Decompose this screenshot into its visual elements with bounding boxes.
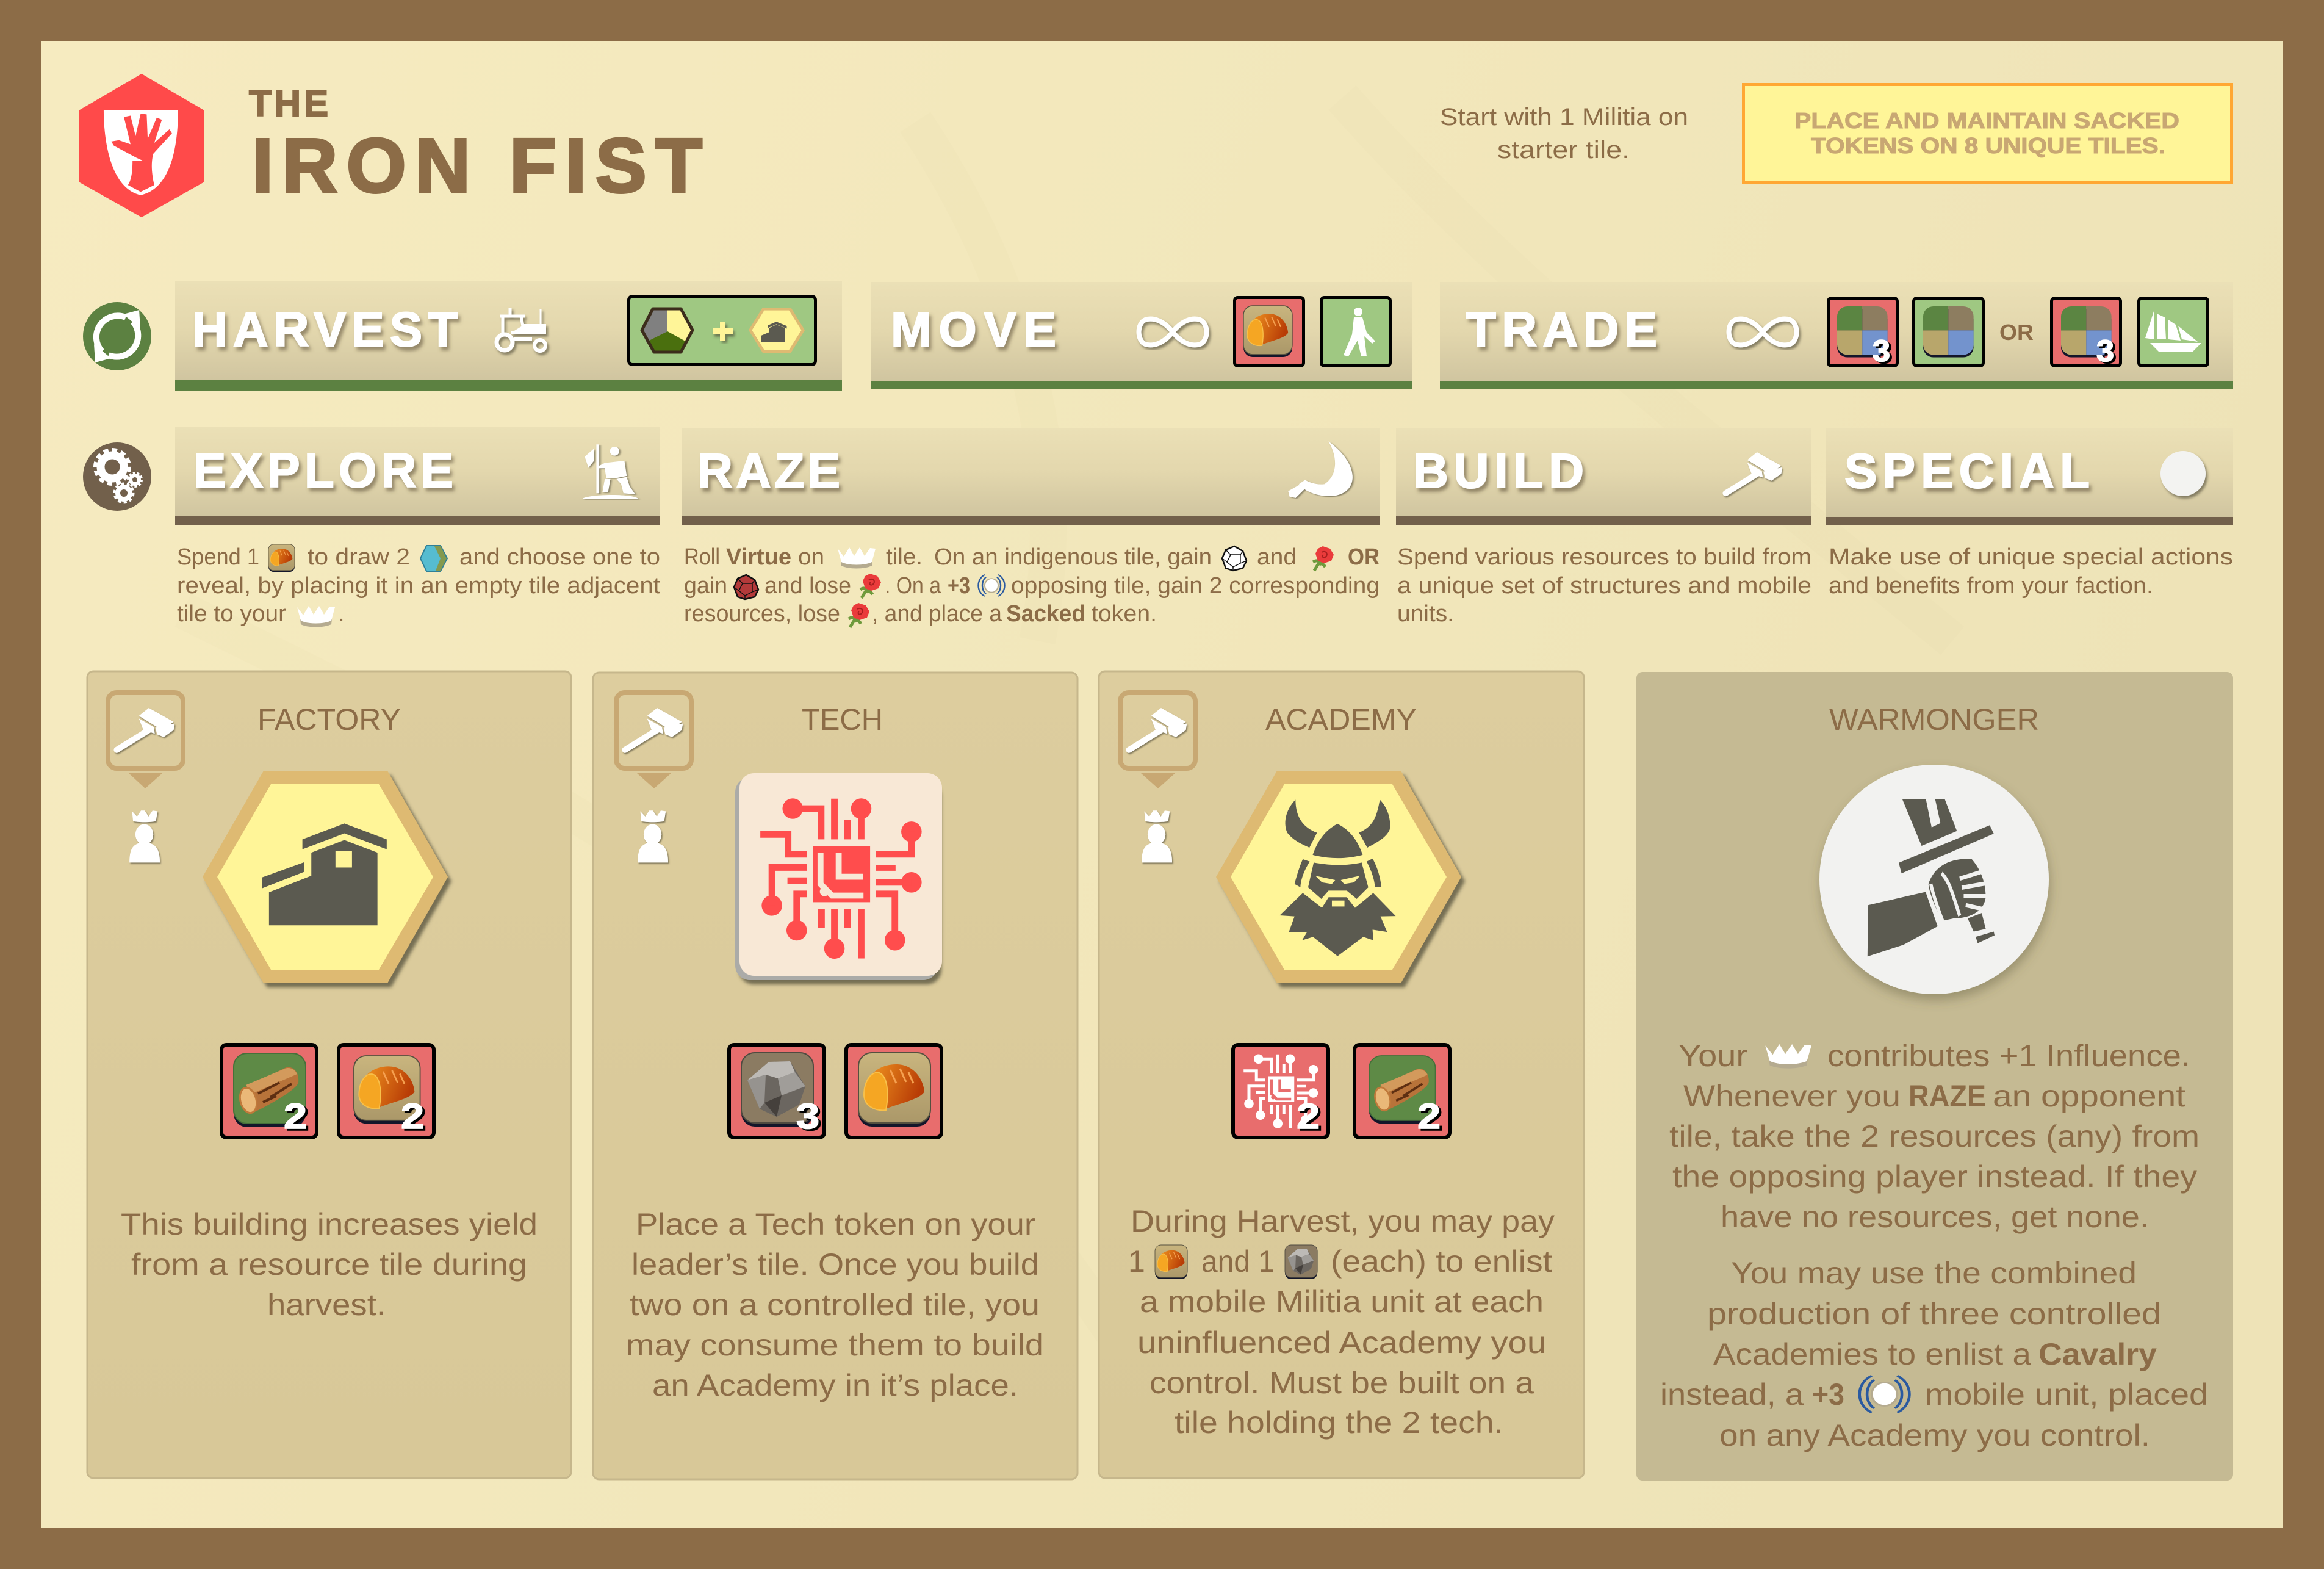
setup text: starter tile. bbox=[1497, 137, 1630, 164]
text block: raze: +3 bbox=[948, 573, 970, 599]
heading: harvest: HARVEST bbox=[192, 302, 458, 356]
panel: explore bbox=[175, 427, 660, 525]
icon: virtue ring bbox=[1860, 1376, 1909, 1413]
icon: leader bbox=[1142, 810, 1172, 862]
heading: academy: ACADEMY bbox=[1265, 702, 1417, 737]
icon: white disc bbox=[2160, 451, 2206, 496]
text block: raze: resources, lose bbox=[684, 601, 840, 627]
heading: factory: FACTORY bbox=[257, 702, 401, 737]
text block: raze: tile. bbox=[886, 544, 923, 570]
text: tech description bbox=[626, 1207, 1044, 1402]
logo: red hexagon with hand shield bbox=[80, 74, 203, 217]
build badge bbox=[108, 693, 183, 788]
icon: hex tile bbox=[420, 546, 447, 571]
text: warmonger first paragraph: Whenever you bbox=[1683, 1079, 1901, 1113]
text block: raze: On an indigenous tile, gain bbox=[934, 544, 1212, 570]
panel: harvest bbox=[175, 281, 842, 391]
icon: rose bbox=[849, 603, 869, 627]
icon: bread bbox=[268, 544, 295, 572]
icon: bread bbox=[1155, 1245, 1187, 1279]
icon: virtue ring bbox=[979, 575, 1004, 596]
text block: raze: gain bbox=[684, 573, 727, 599]
text block: explore: to draw 2 bbox=[308, 544, 410, 570]
title bbox=[249, 83, 702, 209]
icon: infinity bbox=[1139, 319, 1207, 345]
cost: 2 wood bbox=[221, 1045, 317, 1138]
text: warmonger first paragraph bbox=[1669, 1039, 2200, 1234]
token: bread cost bbox=[1235, 298, 1303, 366]
text block: explore: reveal, by placing it in an empty tile adjacent bbox=[177, 573, 660, 599]
icon: rose bbox=[860, 574, 881, 598]
text: warmonger first paragraph: contributes +1 Influence. bbox=[1827, 1039, 2190, 1073]
text block: raze: and bbox=[1257, 544, 1297, 570]
heading: raze: RAZE bbox=[697, 444, 840, 498]
token: three resources cost bbox=[2051, 298, 2121, 368]
icon: explorer with flag bbox=[583, 444, 638, 499]
cost: 2 bread bbox=[339, 1045, 434, 1138]
token: three resources cost: 3 bbox=[1873, 334, 1890, 368]
text block: raze: . On a bbox=[885, 573, 941, 599]
text block: special: and benefits from your faction. bbox=[1829, 573, 2153, 599]
heading: special: SPECIAL bbox=[1844, 444, 2090, 498]
text block: explore bbox=[177, 544, 660, 627]
text block: explore: Spend 1 bbox=[177, 544, 259, 570]
text block: explore: tile to your bbox=[177, 601, 286, 627]
icon: stone bbox=[1285, 1245, 1317, 1279]
panel: raze bbox=[682, 428, 1380, 525]
text block: raze: opposing tile, gain 2 corresponding bbox=[1011, 573, 1380, 599]
icon: white die bbox=[1222, 546, 1247, 571]
token: three resources cost: 3 bbox=[2096, 334, 2114, 368]
text: warmonger second paragraph: on any Academy you control. bbox=[1719, 1418, 2150, 1452]
icon: scythe bbox=[1288, 441, 1353, 498]
icon: tech tile bbox=[735, 773, 942, 980]
heading: trade: TRADE bbox=[1466, 302, 1657, 356]
text block: raze: and lose bbox=[764, 573, 851, 599]
icon: recurring actions bbox=[83, 302, 151, 370]
text block: raze: , and place a bbox=[872, 601, 1002, 627]
heading: move: MOVE bbox=[891, 302, 1056, 356]
text: factory description: This building increases yield bbox=[121, 1207, 538, 1241]
token: ship bbox=[2139, 298, 2207, 366]
text: factory description: from a resource tile during bbox=[131, 1247, 527, 1282]
text block: special: Make use of unique special actions bbox=[1829, 544, 2233, 570]
text: warmonger first paragraph: an opponent bbox=[1993, 1079, 2185, 1113]
text block: raze: on bbox=[798, 544, 824, 570]
text block: build: a unique set of structures and mobile bbox=[1397, 573, 1811, 599]
cost: 2 wood: 2 bbox=[1417, 1097, 1441, 1136]
panel: warmonger card bbox=[1636, 672, 2233, 1481]
heading: tech: TECH bbox=[802, 702, 883, 737]
icon: gears bbox=[83, 442, 151, 511]
text block: special bbox=[1829, 544, 2233, 599]
tokens: tile plus factory bbox=[628, 297, 815, 365]
text: warmonger first paragraph: the opposing player instead. If they bbox=[1672, 1160, 2197, 1194]
text block: explore: . bbox=[338, 601, 345, 627]
text: warmonger first paragraph: Your bbox=[1678, 1039, 1747, 1073]
panel: move bbox=[871, 282, 1412, 389]
setup text bbox=[1440, 104, 1688, 164]
text: warmonger second paragraph: Academies to enlist a bbox=[1713, 1337, 2031, 1371]
heading: explore: EXPLORE bbox=[193, 443, 453, 497]
build badge bbox=[1120, 693, 1195, 788]
icon: leader bbox=[638, 810, 668, 862]
text: academy description: a mobile Militia unit at each bbox=[1140, 1285, 1544, 1319]
text: warmonger second paragraph: +3 bbox=[1812, 1377, 1844, 1412]
goal callout bbox=[1744, 84, 2232, 183]
icon: infinity bbox=[1729, 319, 1796, 345]
cost: bread bbox=[846, 1045, 941, 1138]
icon: leader bbox=[129, 810, 160, 862]
icon: hammer bbox=[1725, 452, 1782, 493]
text: tech description: an Academy in it’s place. bbox=[652, 1368, 1018, 1402]
heading: build: BUILD bbox=[1413, 444, 1584, 498]
text: warmonger second paragraph bbox=[1660, 1256, 2208, 1452]
text block: explore: and choose one to bbox=[459, 544, 660, 570]
text: warmonger first paragraph: RAZE bbox=[1908, 1079, 1986, 1113]
goal callout: TOKENS ON 8 UNIQUE TILES. bbox=[1811, 133, 2165, 158]
text: factory description: harvest. bbox=[267, 1288, 386, 1322]
text block: raze: Roll bbox=[684, 544, 720, 570]
icon: academy hex with viking bbox=[1216, 771, 1461, 983]
setup text: Start with 1 Militia on bbox=[1440, 104, 1688, 131]
text block: raze bbox=[684, 544, 1380, 627]
cost: 2 tech bbox=[1233, 1045, 1328, 1138]
text block: raze: token. bbox=[1092, 601, 1157, 627]
text: academy description: (each) to enlist bbox=[1331, 1244, 1552, 1279]
text block: build: units. bbox=[1397, 601, 1454, 627]
icon: hand gripping sword on disc bbox=[1819, 765, 2049, 994]
goal callout: PLACE AND MAINTAIN SACKED bbox=[1794, 108, 2179, 133]
icon: crown bbox=[297, 606, 335, 627]
build badge bbox=[616, 693, 691, 788]
text block: build: Spend various resources to build from bbox=[1397, 544, 1811, 570]
text: warmonger second paragraph: mobile unit, placed bbox=[1925, 1377, 2208, 1412]
text: tech description: two on a controlled tile, you bbox=[630, 1288, 1040, 1322]
token: any resource gain bbox=[1913, 298, 1983, 366]
text: academy description: During Harvest, you may pay bbox=[1131, 1204, 1555, 1238]
label: or: OR bbox=[1999, 320, 2034, 345]
text: warmonger second paragraph: instead, a bbox=[1660, 1377, 1804, 1412]
text: warmonger second paragraph: You may use the combined bbox=[1731, 1256, 2137, 1290]
panel: academy card bbox=[1099, 671, 1584, 1478]
icon: rose bbox=[1313, 546, 1334, 571]
panel: trade bbox=[1440, 282, 2233, 389]
panel: special bbox=[1826, 428, 2233, 525]
text block: raze: Virtue bbox=[726, 544, 791, 570]
text: tech description: Place a Tech token on your bbox=[636, 1207, 1035, 1241]
text: academy description: tile holding the 2 tech. bbox=[1175, 1405, 1503, 1440]
icon: tractor bbox=[497, 308, 545, 351]
text: academy description: and 1 bbox=[1201, 1244, 1275, 1279]
panel: factory card bbox=[87, 671, 571, 1478]
icon: factory hex bbox=[203, 771, 448, 983]
text: tech description: leader’s tile. Once you build bbox=[631, 1247, 1039, 1282]
icon: crown bbox=[838, 547, 876, 569]
text: academy description: uninfluenced Academy you bbox=[1137, 1326, 1546, 1360]
text block: build bbox=[1397, 544, 1811, 627]
text: warmonger first paragraph: have no resources, get none. bbox=[1721, 1200, 2149, 1234]
cost: 2 wood: 2 bbox=[284, 1097, 307, 1136]
cost: 3 stone: 3 bbox=[796, 1097, 819, 1136]
text block: raze: Sacked bbox=[1006, 601, 1085, 627]
cost: 3 stone bbox=[729, 1045, 824, 1138]
cost: 2 wood bbox=[1354, 1045, 1450, 1138]
text: tech description: may consume them to build bbox=[626, 1328, 1044, 1362]
icon: red die bbox=[734, 575, 758, 599]
panel: build bbox=[1396, 428, 1811, 525]
text: academy description: 1 bbox=[1128, 1244, 1145, 1279]
text: warmonger second paragraph: production of three controlled bbox=[1707, 1297, 2161, 1331]
icon: crown bbox=[1765, 1044, 1811, 1069]
title: THE bbox=[249, 83, 328, 124]
cost: 2 bread: 2 bbox=[401, 1097, 424, 1136]
panel: tech card bbox=[593, 673, 1077, 1479]
text: warmonger first paragraph: tile, take the 2 resources (any) from bbox=[1669, 1119, 2200, 1153]
token: walking unit bbox=[1322, 298, 1390, 366]
text: academy description bbox=[1128, 1204, 1555, 1440]
text: factory description bbox=[121, 1207, 538, 1322]
title: IRON FIST bbox=[252, 123, 702, 209]
token: three resources cost bbox=[1828, 298, 1898, 368]
cost: 2 tech: 2 bbox=[1297, 1097, 1320, 1136]
heading: warmonger: WARMONGER bbox=[1829, 702, 2039, 737]
text: academy description: control. Must be built on a bbox=[1149, 1366, 1534, 1400]
text block: raze: OR bbox=[1348, 544, 1380, 570]
text: warmonger second paragraph: Cavalry bbox=[2038, 1337, 2157, 1371]
